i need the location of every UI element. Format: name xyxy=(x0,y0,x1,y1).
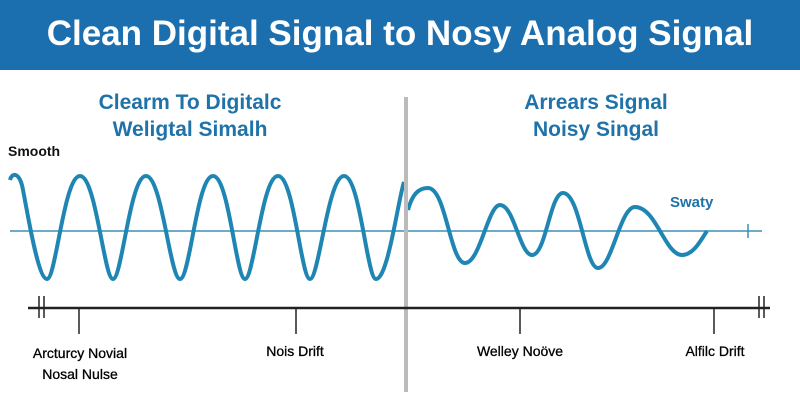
heading: right: Noisy Singal xyxy=(533,118,659,141)
label: arcturcy: Arcturcy Novial xyxy=(33,345,127,361)
label: alfilc drift: Alfilc Drift xyxy=(685,343,745,359)
noisy wave xyxy=(408,188,707,268)
clean wave xyxy=(10,175,404,279)
heading: left: Clearm To Digitalc xyxy=(99,91,281,114)
label: smooth: Smooth xyxy=(8,143,60,159)
label: arcturcy xyxy=(32,345,127,382)
title: Clean Digital Signal to Nosy Analog Signal xyxy=(47,14,753,53)
label: nois drift: Nois Drift xyxy=(266,343,324,359)
heading: left: Weligtal Simalh xyxy=(113,118,267,141)
label: welley noove: Welley Noöve xyxy=(477,343,563,359)
heading: right xyxy=(524,91,668,141)
title bar xyxy=(0,0,800,70)
label: arcturcy: Nosal Nulse xyxy=(42,366,118,382)
divider xyxy=(404,97,408,392)
heading: left xyxy=(99,91,281,141)
label: swaty: Swaty xyxy=(670,194,713,211)
heading: right: Arrears Signal xyxy=(524,91,668,114)
timeline xyxy=(28,307,770,309)
